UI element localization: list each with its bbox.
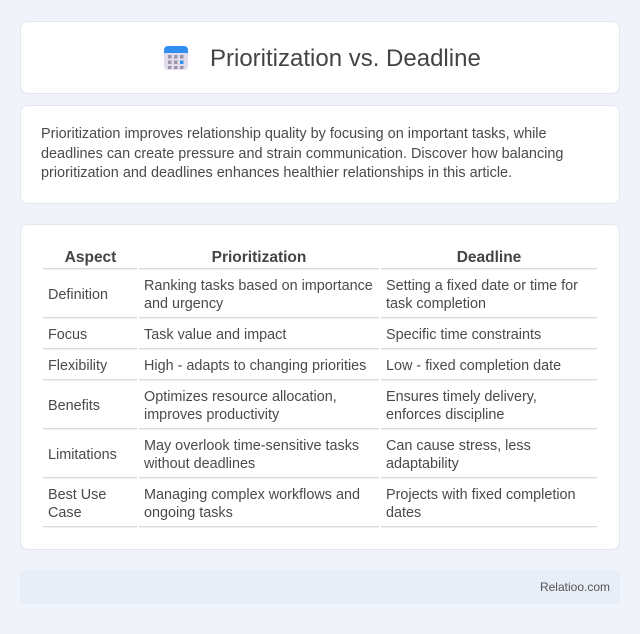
header: Prioritization: Prioritization xyxy=(212,249,306,266)
row: Best Use Case: Projects with fixed completion xyxy=(386,487,576,503)
row: Benefits: Benefits xyxy=(48,398,100,414)
row: Flexibility: High - adapts to changing priorities xyxy=(144,358,366,374)
row: Flexibility: Flexibility xyxy=(48,358,107,374)
row: Definition: Definition xyxy=(48,287,108,303)
row: Best Use Case xyxy=(48,487,576,521)
row: Flexibility xyxy=(48,358,561,374)
row: Focus: Focus xyxy=(48,327,87,343)
row: Limitations: Limitations xyxy=(48,447,117,463)
row: Focus: Task value and impact xyxy=(144,327,286,343)
row: Best Use Case: Managing complex workflows and xyxy=(144,487,360,503)
row: Definition: Ranking tasks based on importance xyxy=(144,278,373,294)
title: Prioritization vs. Deadline xyxy=(210,45,481,72)
row: Definition: Setting a fixed date or time for xyxy=(386,278,578,294)
row: Focus: Specific time constraints xyxy=(386,327,541,343)
header: Aspect: Aspect xyxy=(65,249,116,266)
comparison table xyxy=(43,249,597,528)
intro text: prioritization and deadlines enhances healthier relationships in this article. xyxy=(41,165,512,181)
row: Focus xyxy=(48,327,541,343)
footer text: Relatioo.com xyxy=(540,580,610,594)
panel: title card xyxy=(20,21,620,94)
row: Benefits: Optimizes resource allocation, xyxy=(144,389,337,405)
row: Limitations: May overlook time-sensitive tasks xyxy=(144,438,359,454)
row: Limitations: adaptability xyxy=(386,456,459,472)
header: Deadline: Deadline xyxy=(457,249,521,266)
icon: calendar xyxy=(164,46,188,70)
row: Benefits xyxy=(48,389,537,423)
row: Definition: task completion xyxy=(386,296,486,312)
row: Best Use Case: Case xyxy=(48,505,82,521)
row: Best Use Case: ongoing tasks xyxy=(144,505,233,521)
row: Limitations: Can cause stress, less xyxy=(386,438,531,454)
row: Benefits: Ensures timely delivery, xyxy=(386,389,537,405)
intro text: deadlines can create pressure and strain communication. Discover how balancing xyxy=(41,146,563,162)
footer bar xyxy=(20,570,620,604)
row: Definition: and urgency xyxy=(144,296,223,312)
panel: intro text card xyxy=(20,105,620,204)
row: Benefits: enforces discipline xyxy=(386,407,504,423)
row: Definition xyxy=(48,278,578,312)
intro text xyxy=(41,126,563,181)
row: Best Use Case: Best Use xyxy=(48,487,106,503)
row: Flexibility: Low - fixed completion date xyxy=(386,358,561,374)
panel: comparison table card xyxy=(20,224,620,550)
row: Best Use Case: dates xyxy=(386,505,421,521)
row: Benefits: improves productivity xyxy=(144,407,279,423)
row: Limitations xyxy=(48,438,531,472)
intro text: Prioritization improves relationship quality by focusing on important tasks, while xyxy=(41,126,547,142)
row: Limitations: without deadlines xyxy=(144,456,255,472)
